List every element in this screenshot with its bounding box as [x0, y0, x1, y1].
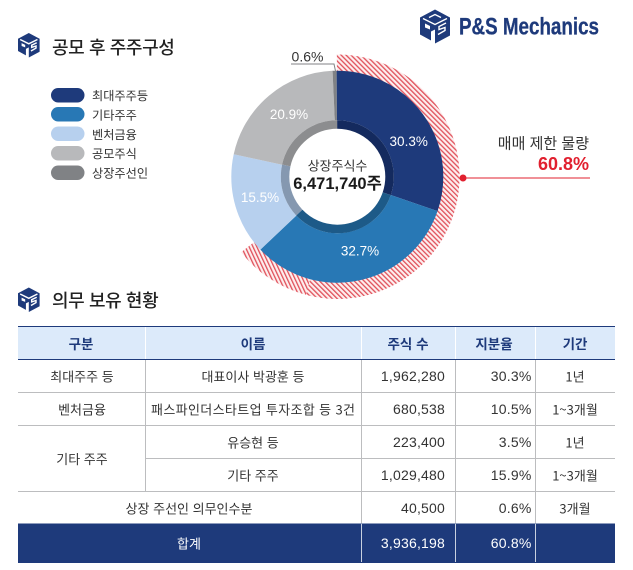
table header: 주식 수: [387, 333, 429, 353]
slice label 30.3%: 30.3%: [390, 134, 428, 149]
legend item: 기타주주: 기타주주: [92, 106, 137, 124]
row: 벤처금융: 680,538: [393, 401, 445, 417]
heading: 공모 후 주주구성: 공모 후 주주구성: [52, 34, 174, 60]
trading restricted hatched arc: [223, 63, 451, 291]
icon: section cube: [18, 33, 40, 57]
row: 기타 주주: 223,400: [393, 434, 445, 450]
row: 기타 주주: 유승현 등: [227, 432, 279, 452]
legend: [51, 86, 148, 182]
row: 합계: [18, 524, 615, 563]
row: 최대주주 등: 1,962,280: [381, 368, 445, 384]
row: 벤처금융: 패스파인더스타트업 투자조합 등 3건: [151, 400, 355, 418]
row: 상장 주선인 의무인수분: 0.6%: [499, 500, 532, 516]
row: 합계: 3,936,198: [381, 535, 445, 551]
callout: 매매 제한 물량: [460, 132, 590, 182]
row: 기타 주주: 15.9%: [491, 467, 532, 483]
logo: P&S Mechanics: [420, 10, 599, 44]
row: 최대주주 등: 대표이사 박광훈 등: [202, 366, 305, 386]
center label: 6,471,740주: [293, 175, 382, 193]
row: 최대주주 등: 최대주주 등: [50, 366, 114, 386]
legend item: 최대주주등: 최대주주등: [92, 86, 148, 104]
row: 벤처금융: 벤처금융: [58, 400, 106, 418]
row: 합계: 60.8%: [491, 535, 532, 551]
center label: 상장주식수: [308, 156, 367, 174]
center label: [293, 156, 382, 193]
row: 최대주주 등: 1년: [565, 366, 585, 386]
icon: section cube: [18, 288, 40, 312]
table header: 구분: [69, 333, 93, 353]
table header: 이름: [241, 333, 265, 353]
slice label 15.5%: 15.5%: [241, 190, 279, 205]
heading: 의무 보유 현황: 의무 보유 현황: [52, 287, 158, 313]
row: 벤처금융: [58, 400, 598, 418]
slice label 32.7%: 32.7%: [341, 244, 379, 258]
row: 최대주주 등: [50, 366, 585, 386]
slice label 0.6% with leader: 0.6%: [292, 48, 323, 64]
row: 기타 주주: 기타 주주: [227, 466, 279, 484]
legend item: 공모주식: 공모주식: [92, 144, 137, 162]
inner shaded ring: [285, 124, 390, 229]
icon: logo cube: [420, 10, 450, 44]
row: 최대주주 등: 30.3%: [491, 368, 532, 384]
row: 기타 주주: 기타 주주: [56, 449, 108, 468]
row: 합계: 합계: [177, 534, 201, 552]
row: 상장 주선인 의무인수분: 3개월: [559, 498, 591, 518]
row: 기타 주주: 1~3개월: [552, 466, 598, 484]
table header: 지분율: [475, 333, 513, 353]
slice label 0.6% with leader: [291, 48, 336, 71]
donut chart: [223, 48, 451, 291]
row: 상장 주선인 의무인수분: [126, 498, 591, 518]
row: 상장 주선인 의무인수분: 상장 주선인 의무인수분: [126, 498, 252, 518]
row: 기타 주주: 3.5%: [499, 434, 532, 450]
legend item: 벤처금융: 벤처금융: [92, 125, 137, 143]
lock-up table: [18, 326, 615, 563]
row: 기타 주주: [56, 432, 598, 484]
table header: 기간: [563, 333, 588, 353]
table header: [18, 326, 615, 360]
callout: 매매 제한 물량: 60.8%: [538, 154, 589, 174]
table grid: [18, 360, 615, 523]
donut slices: [256, 95, 419, 258]
logo: P&S Mechanics: P&S Mechanics: [459, 14, 599, 40]
legend item: 상장주선인: 상장주선인: [92, 164, 148, 182]
row: 벤처금융: 1~3개월: [552, 400, 598, 418]
callout: 매매 제한 물량: 매매 제한 물량: [498, 132, 589, 154]
row: 벤처금융: 10.5%: [491, 401, 532, 417]
row: 기타 주주: 1,029,480: [381, 467, 445, 483]
row: 상장 주선인 의무인수분: 40,500: [401, 500, 445, 516]
row: 기타 주주: 1년: [565, 432, 585, 452]
slice label 20.9%: 20.9%: [270, 107, 308, 122]
